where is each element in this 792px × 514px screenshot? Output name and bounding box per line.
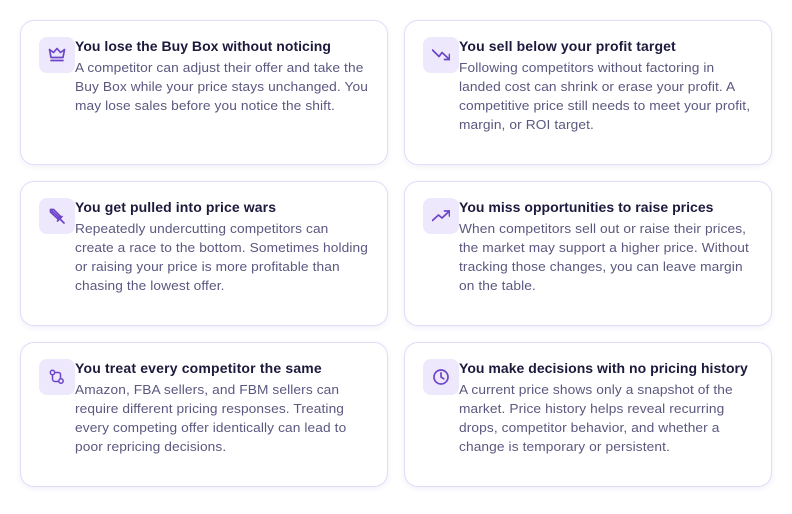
text block: tracking those changes, you can leave margin	[459, 259, 743, 274]
icon: crown	[39, 37, 75, 73]
text block	[459, 382, 733, 454]
text block: may lose sales before you notice the shift.	[75, 98, 335, 113]
panel: sell below profit target	[404, 20, 772, 165]
text block: poor repricing decisions.	[75, 439, 226, 454]
text block: market. Price history helps reveal recurring	[459, 401, 724, 416]
text block: the market may support a higher price. Without	[459, 240, 749, 255]
text block: every competing offer identically can lead to	[75, 420, 346, 435]
text block	[75, 221, 368, 293]
text block: require different pricing responses. Treating	[75, 401, 344, 416]
icon: route arrows	[39, 359, 75, 395]
text block	[459, 60, 750, 132]
heading: You treat every competitor the same	[75, 360, 322, 376]
heading: You get pulled into price wars	[75, 199, 276, 215]
text block: create a race to the bottom. Sometimes holding	[75, 240, 368, 255]
panel: treat every competitor the same	[20, 342, 388, 487]
heading: You sell below your profit target	[459, 38, 676, 54]
text block: When competitors sell out or raise their prices,	[459, 221, 746, 236]
text block: or raising your price is more profitable than	[75, 259, 340, 274]
icon: sword	[39, 198, 75, 234]
text block: Repeatedly undercutting competitors can	[75, 221, 328, 236]
panel: no pricing history	[404, 342, 772, 487]
text block: competitive price still needs to meet your profit,	[459, 98, 750, 113]
text block	[75, 382, 346, 454]
panel: miss opportunities	[404, 181, 772, 326]
text block: change is temporary or persistent.	[459, 439, 670, 454]
text block: A current price shows only a snapshot of the	[459, 382, 733, 397]
icon: trending down	[423, 37, 459, 73]
text block: Following competitors without factoring in	[459, 60, 714, 75]
text block: Amazon, FBA sellers, and FBM sellers can	[75, 382, 339, 397]
heading: You miss opportunities to raise prices	[459, 199, 714, 215]
text block: Buy Box while your price stays unchanged. You	[75, 79, 368, 94]
text block	[75, 60, 368, 113]
heading: You lose the Buy Box without noticing	[75, 38, 331, 54]
text block: margin, or ROI target.	[459, 117, 594, 132]
heading: You make decisions with no pricing history	[459, 360, 748, 376]
text block: chasing the lowest offer.	[75, 278, 225, 293]
text block: A competitor can adjust their offer and take the	[75, 60, 363, 75]
panel: price wars	[20, 181, 388, 326]
text block: landed cost can shrink or erase your profit. A	[459, 79, 735, 94]
panel: lose the Buy Box	[20, 20, 388, 165]
icon: trending up	[423, 198, 459, 234]
icon: clock	[423, 359, 459, 395]
text block	[459, 221, 749, 293]
text block: on the table.	[459, 278, 536, 293]
text block: drops, competitor behavior, and whether a	[459, 420, 720, 435]
